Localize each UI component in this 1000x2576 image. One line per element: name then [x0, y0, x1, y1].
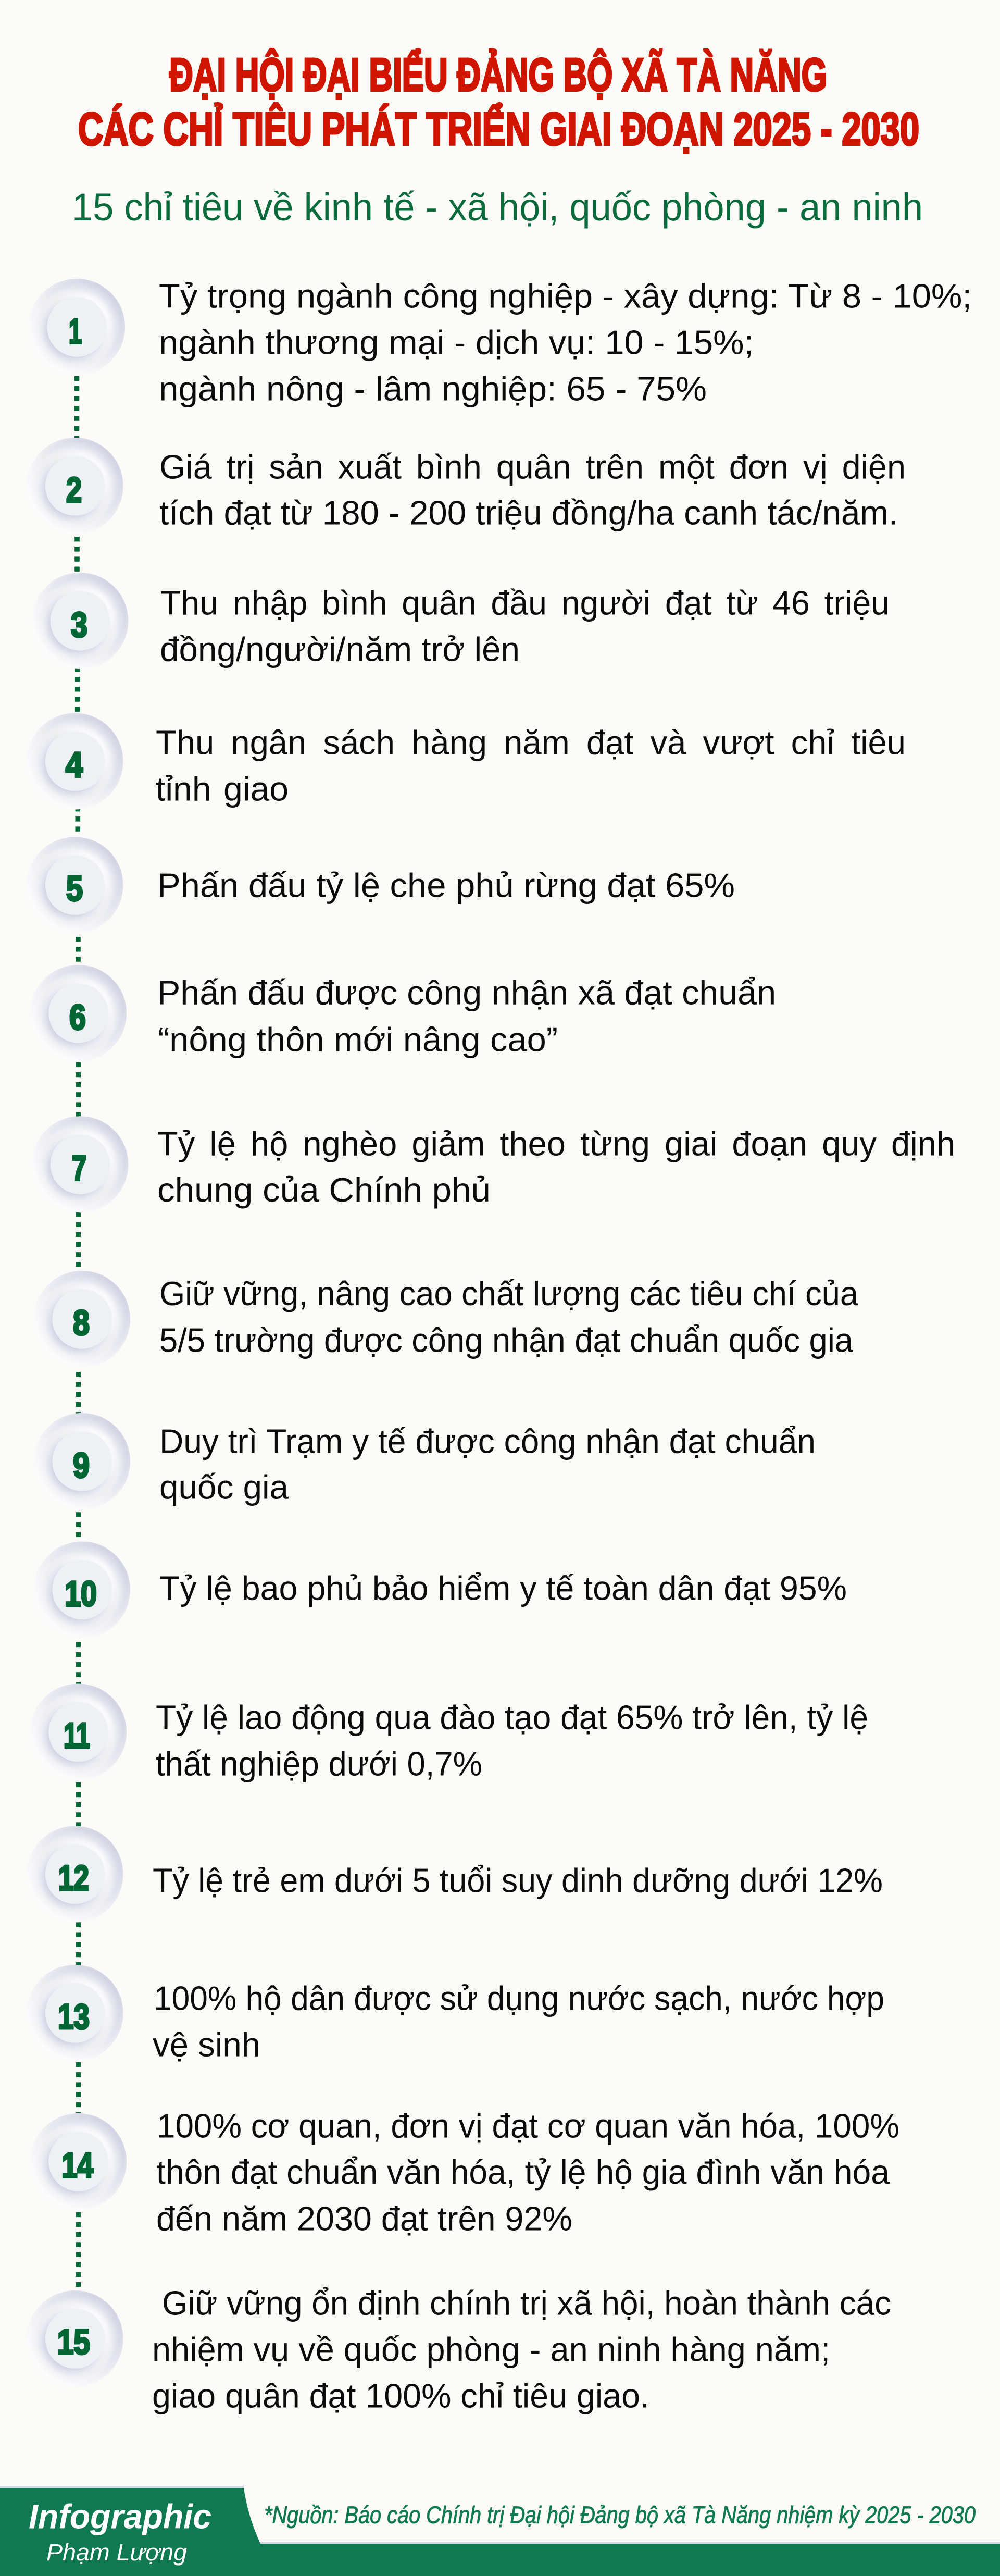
text 11	[156, 1698, 868, 1782]
text 15: nhiệm vụ về quốc phòng - an ninh hàng năm;	[152, 2331, 830, 2369]
item 8	[34, 1271, 859, 1367]
text 2	[159, 448, 906, 532]
footer shadow strip	[0, 2486, 1000, 2544]
text 5: Phấn đấu tỷ lệ che phủ rừng đạt 65%	[157, 866, 735, 905]
text 1	[159, 277, 972, 407]
badge 13	[27, 1965, 123, 2061]
text 6	[157, 974, 776, 1058]
badge 10	[34, 1541, 130, 1638]
badge 6: 6	[69, 998, 86, 1037]
text 1: ngành thương mại - dịch vụ: 10 - 15%;	[159, 323, 754, 361]
text 13: vệ sinh	[153, 2026, 260, 2064]
badge 10: 10	[65, 1574, 97, 1614]
badge 6	[30, 965, 127, 1061]
text 4: Thu ngân sách hàng năm đạt và vượt chỉ tiêu	[156, 723, 906, 761]
badge 12: 12	[58, 1858, 89, 1898]
badge 1: 1	[69, 312, 82, 351]
text 9	[159, 1422, 816, 1506]
dotted connectors	[77, 376, 78, 2287]
badge 2: 2	[66, 470, 82, 510]
text 14: đến năm 2030 đạt trên 92%	[156, 2200, 572, 2238]
text 8: 5/5 trường được công nhận đạt chuẩn quốc gia	[159, 1321, 854, 1359]
item 15	[27, 2284, 891, 2415]
badge 12	[27, 1826, 123, 1923]
item 9	[34, 1413, 816, 1509]
footer	[0, 2486, 1000, 2576]
text 2: tích đạt từ 180 - 200 triệu đồng/ha canh tác/năm.	[159, 494, 898, 532]
badge 7: 7	[72, 1148, 86, 1188]
badge 15: 15	[57, 2322, 90, 2362]
text 15: Giữ vững ổn định chính trị xã hội, hoàn thành các	[162, 2284, 891, 2322]
badge 9	[34, 1413, 130, 1509]
badge 14	[30, 2113, 127, 2210]
badge 3: 3	[71, 605, 88, 645]
footer green band	[0, 2488, 1000, 2576]
text 9: Duy trì Trạm y tế được công nhận đạt chuẩn	[159, 1422, 816, 1460]
text 9: quốc gia	[159, 1468, 289, 1506]
text 3: đồng/người/năm trở lên	[160, 630, 520, 668]
badge 14: 14	[61, 2146, 93, 2185]
text 7: Tỷ lệ hộ nghèo giảm theo từng giai đoạn quy định	[157, 1124, 955, 1162]
footer brand	[29, 2497, 211, 2566]
badge 1	[29, 279, 125, 375]
badge 15	[27, 2290, 123, 2387]
item 6	[30, 965, 776, 1061]
item 7	[32, 1116, 955, 1212]
text 14: thôn đạt chuẩn văn hóa, tỷ lệ hộ gia đình văn hóa	[156, 2153, 890, 2191]
text 7	[157, 1124, 955, 1209]
item 10	[34, 1541, 847, 1638]
text 1: Tỷ trọng ngành công nghiệp - xây dựng: Từ 8 - 10%;	[159, 277, 972, 315]
footer brand: Phạm Lượng	[46, 2539, 187, 2566]
item 13	[27, 1965, 884, 2064]
item 3	[32, 573, 890, 669]
badge 11: 11	[64, 1716, 90, 1755]
text 6: “nông thôn mới nâng cao”	[158, 1020, 558, 1058]
item 4	[27, 713, 906, 810]
text 6: Phấn đấu được công nhận xã đạt chuẩn	[157, 974, 776, 1012]
text 4	[156, 723, 906, 808]
item 12	[27, 1826, 883, 1923]
badge 5: 5	[66, 869, 83, 909]
text 3: Thu nhập bình quân đầu người đạt từ 46 triệu	[160, 584, 890, 622]
text 13: 100% hộ dân được sử dụng nước sạch, nước hợp	[154, 1979, 884, 2017]
badge 3	[32, 573, 128, 669]
text 11: thất nghiệp dưới 0,7%	[156, 1744, 482, 1782]
badge 5	[27, 837, 123, 933]
text 2: Giá trị sản xuất bình quân trên một đơn vị diện	[159, 448, 906, 486]
badge 7	[32, 1116, 128, 1212]
text 12: Tỷ lệ trẻ em dưới 5 tuổi suy dinh dưỡng dưới 12%	[153, 1862, 883, 1900]
text 11: Tỷ lệ lao động qua đào tạo đạt 65% trở lên, tỷ lệ	[156, 1698, 868, 1736]
title	[78, 48, 919, 155]
item 1	[29, 277, 972, 407]
text 10: Tỷ lệ bao phủ bảo hiểm y tế toàn dân đạt 95%	[159, 1569, 847, 1607]
text 8: Giữ vững, nâng cao chất lượng các tiêu chí của	[159, 1274, 859, 1312]
badge 4: 4	[66, 745, 83, 785]
badge 2	[27, 438, 123, 534]
text 14	[156, 2107, 899, 2238]
badge 8: 8	[73, 1303, 90, 1343]
text 14: 100% cơ quan, đơn vị đạt cơ quan văn hóa, 100%	[157, 2107, 899, 2145]
text 1: ngành nông - lâm nghiệp: 65 - 75%	[159, 369, 707, 407]
text 15: giao quân đạt 100% chỉ tiêu giao.	[152, 2377, 649, 2415]
text 8	[159, 1274, 859, 1359]
text 4: tỉnh giao	[156, 770, 289, 808]
badge 13: 13	[58, 1997, 90, 2036]
badge 8	[34, 1271, 130, 1367]
item 11	[30, 1684, 868, 1782]
badge 11	[30, 1684, 127, 1780]
item 2	[27, 438, 906, 534]
text 7: chung của Chính phủ	[157, 1171, 491, 1209]
badge 9: 9	[73, 1445, 90, 1485]
text 3	[160, 584, 890, 668]
item 5	[27, 837, 735, 933]
badge 4	[27, 713, 123, 810]
text 15	[152, 2284, 891, 2415]
subtitle: 15 chỉ tiêu về kinh tế - xã hội, quốc phòng - an ninh	[72, 185, 923, 229]
item 14	[30, 2107, 899, 2238]
text 13	[153, 1979, 884, 2064]
footer brand: Infographic	[29, 2497, 211, 2536]
